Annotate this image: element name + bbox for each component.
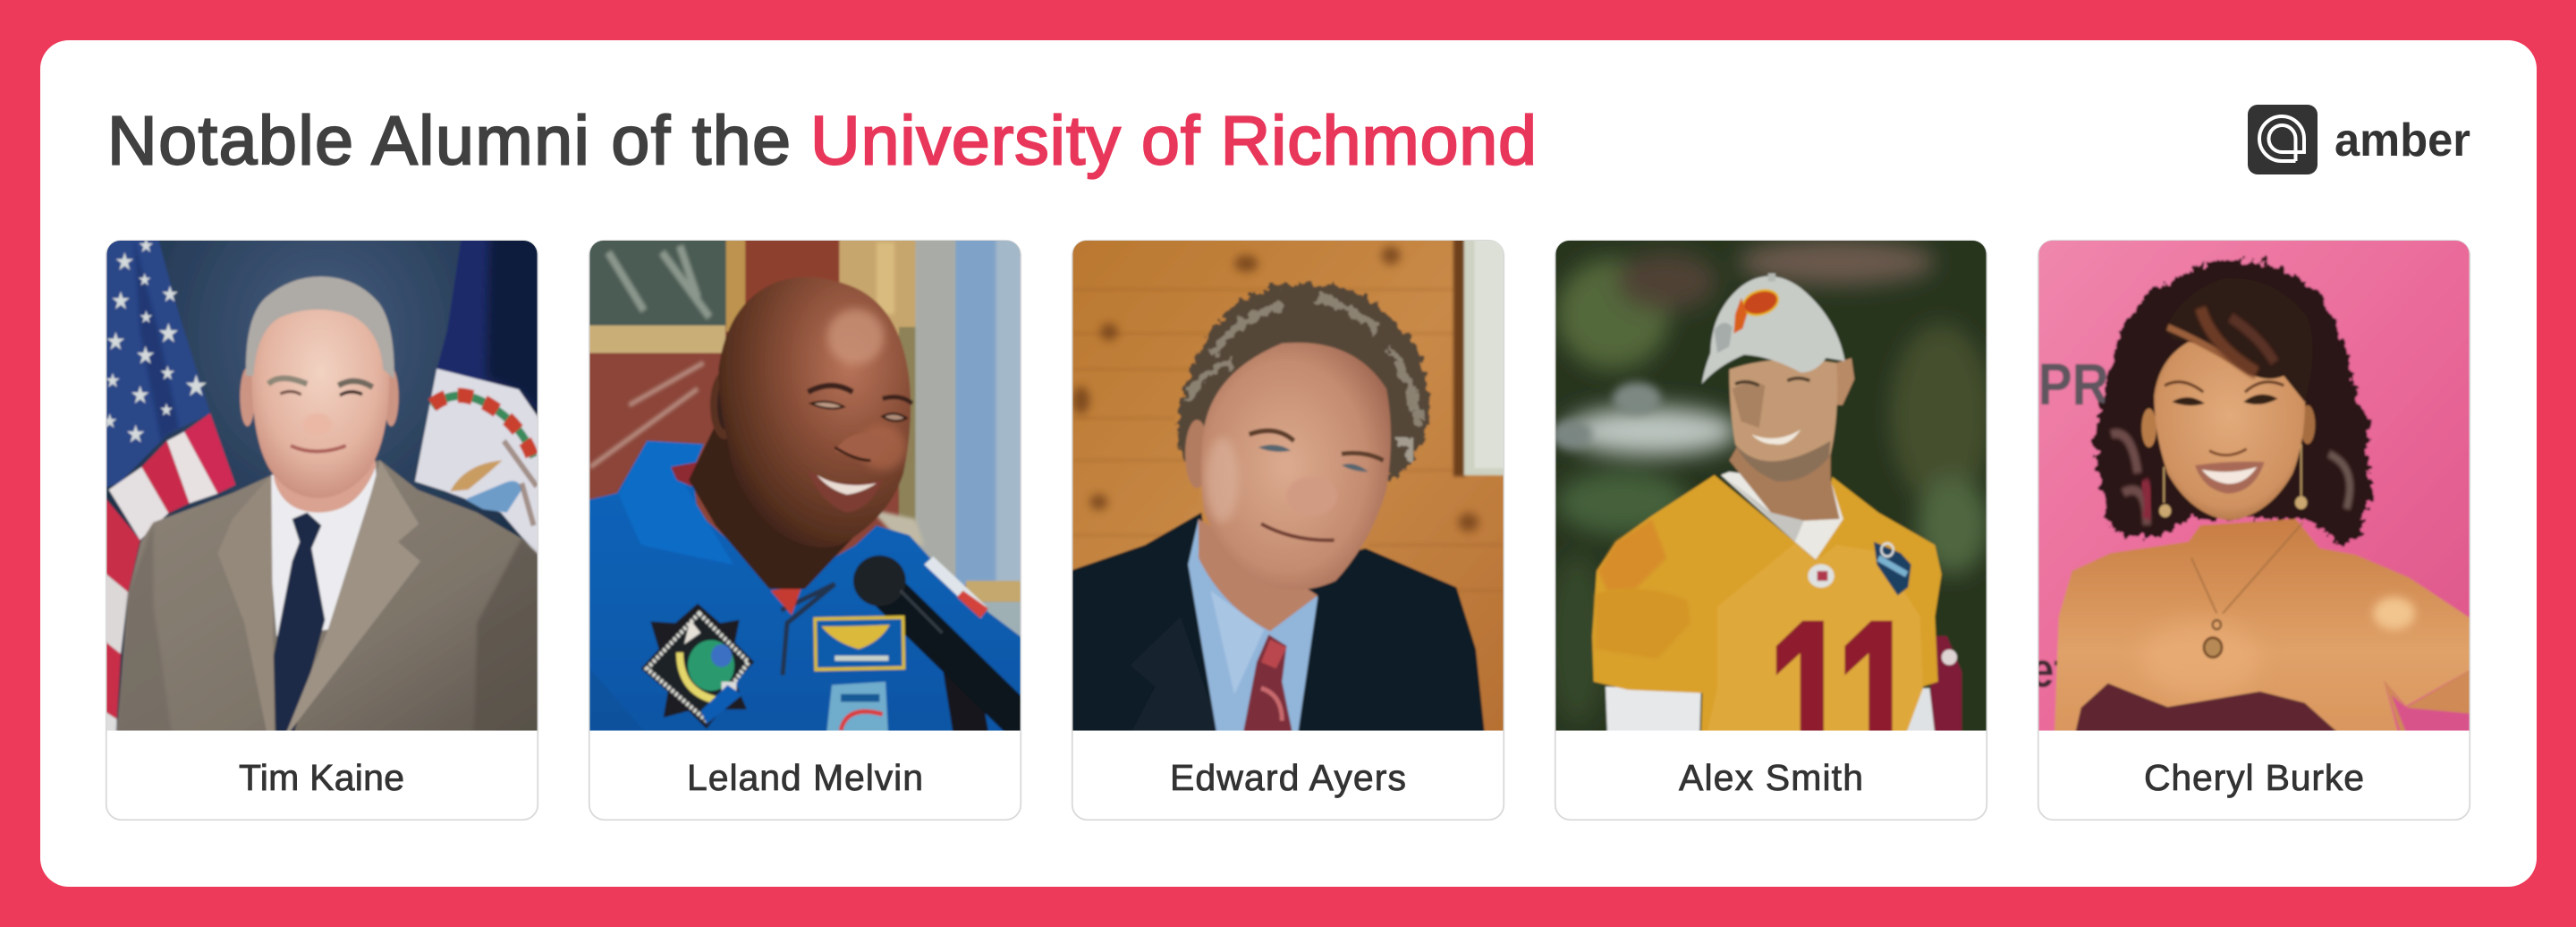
title: Notable Alumni of the <box>107 102 791 179</box>
label: Cheryl Burke <box>2144 757 2364 798</box>
label: Edward Ayers <box>1170 757 1406 798</box>
photo: Alex Smith <box>1556 241 1986 730</box>
panel: Leland Melvin <box>581 233 1029 820</box>
card frame <box>1072 241 1504 820</box>
card frame <box>2038 241 2470 820</box>
photo: Cheryl Burke: et <box>2030 642 2068 697</box>
card frame <box>589 241 1021 820</box>
logo: amber <box>2248 105 2470 174</box>
card frame <box>1555 241 1987 820</box>
panel: Tim Kaine <box>98 233 546 820</box>
label: Tim Kaine <box>239 757 404 798</box>
photo: Alex Smith: 11 <box>1768 577 1914 817</box>
photo: Leland Melvin <box>581 233 1029 740</box>
icon: amber mark <box>2248 105 2318 174</box>
panel: Alex Smith <box>1547 233 1995 820</box>
photo: Cheryl Burke <box>2030 233 2478 740</box>
label: Alex Smith <box>1679 757 1863 798</box>
label: Leland Melvin <box>687 757 923 798</box>
title <box>107 102 1537 179</box>
photo: Cheryl Burke: PR <box>2038 352 2109 418</box>
card frame <box>106 241 538 820</box>
panel: Cheryl Burke <box>2030 233 2478 820</box>
photo: Edward Ayers <box>1064 233 1512 740</box>
photo: Tim Kaine <box>98 233 546 740</box>
logo wordmark: amber <box>2334 115 2470 166</box>
panel: Edward Ayers <box>1064 233 1512 820</box>
title: University of Richmond <box>810 102 1537 179</box>
